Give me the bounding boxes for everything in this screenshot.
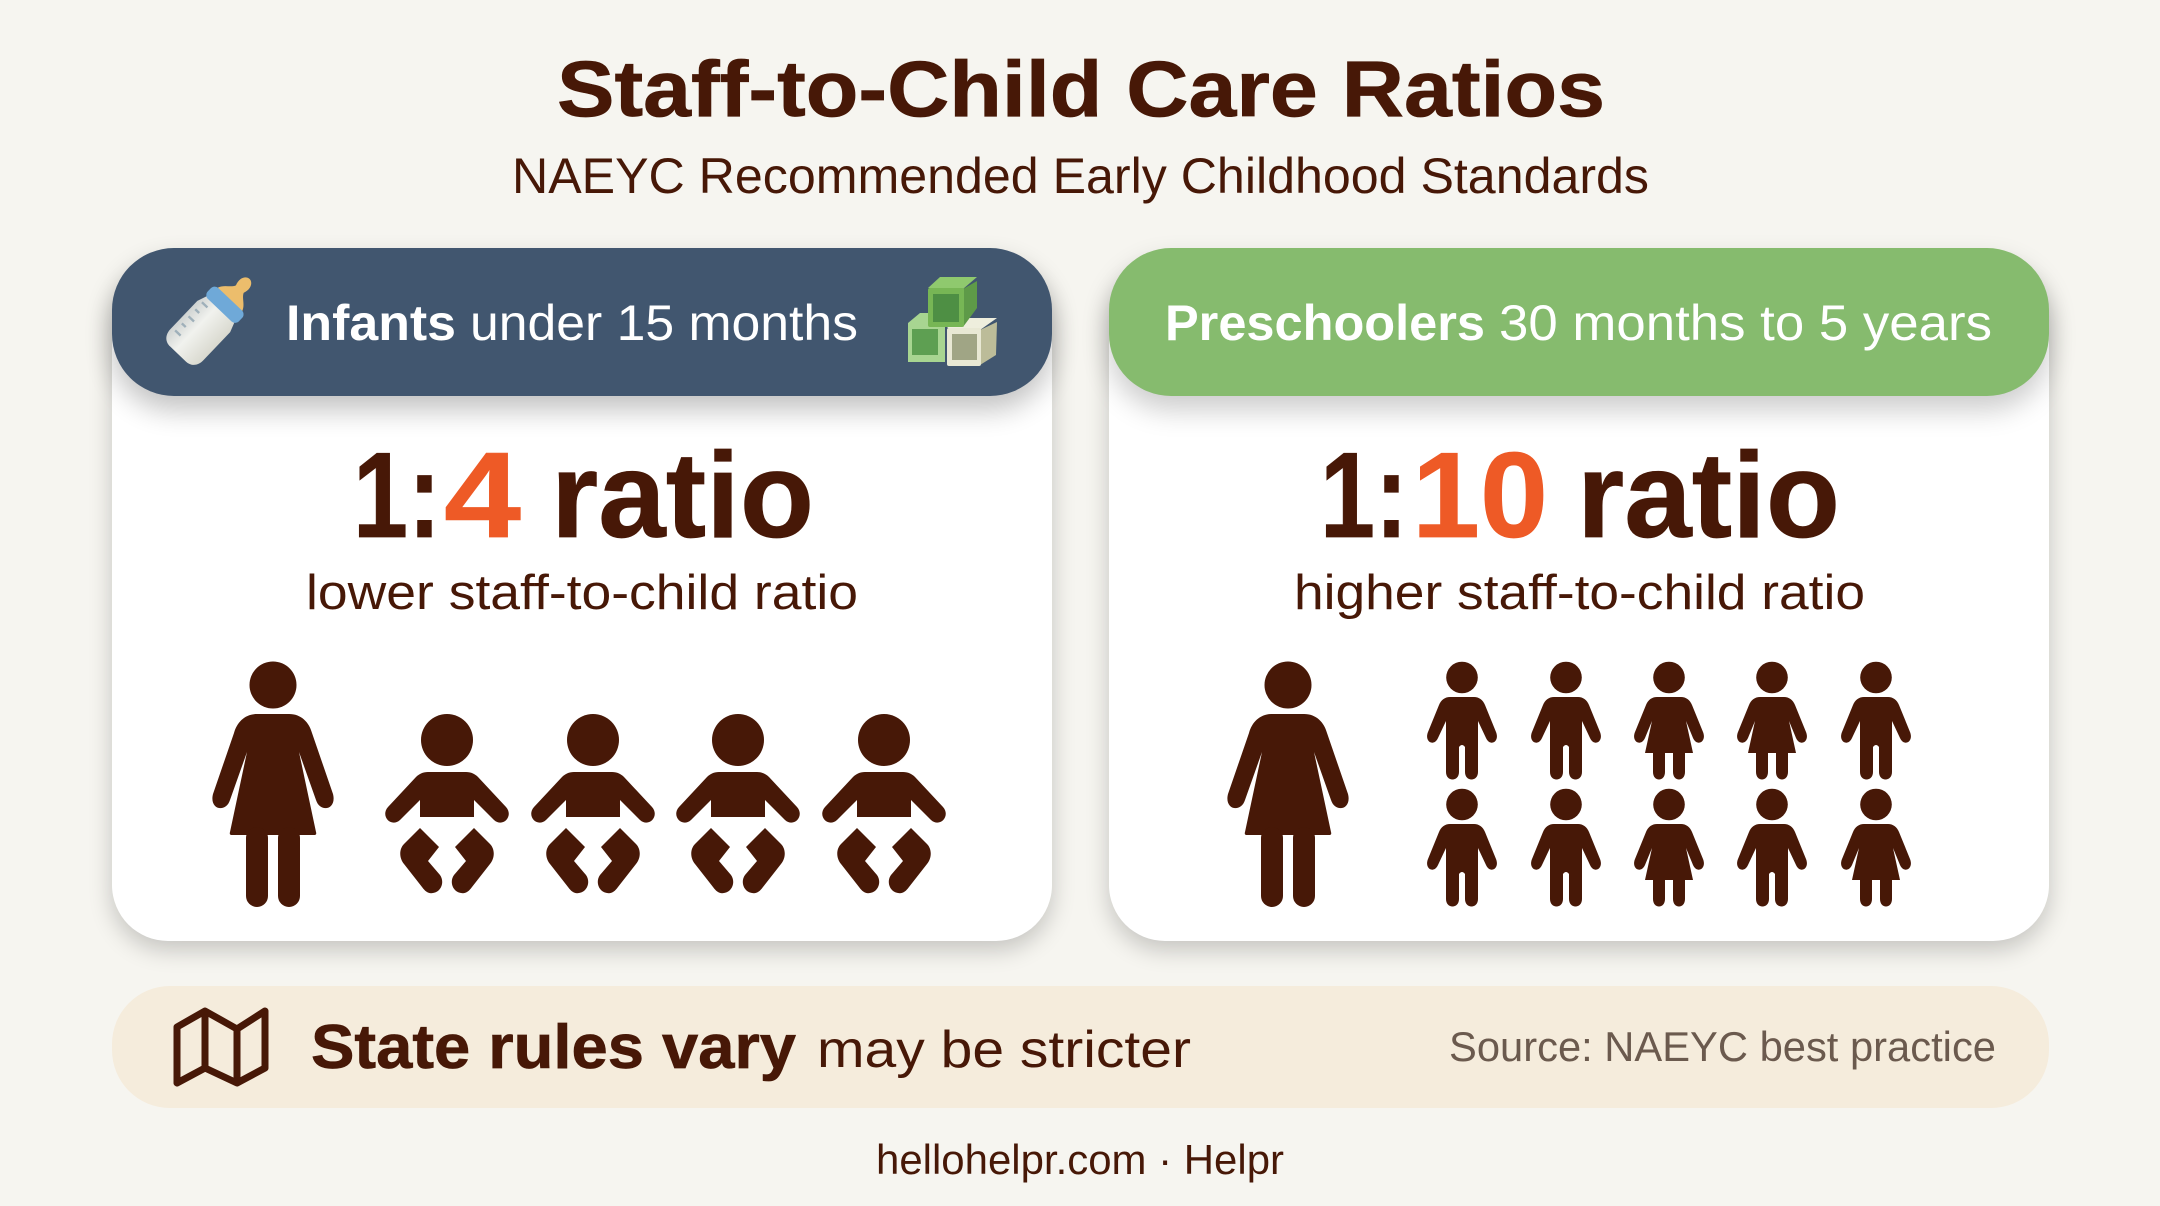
icon: baby bottle <box>162 263 266 370</box>
panel: state rules note <box>112 986 2049 1108</box>
note detail: may be stricter <box>817 1021 1191 1079</box>
icon: toy blocks <box>908 277 997 366</box>
ratio: 1:4: 4 <box>444 427 521 563</box>
card: infants body <box>112 262 1052 950</box>
header text: under 15 months: under 15 months <box>470 295 858 351</box>
caption: lower ratio: lower staff-to-child ratio <box>306 566 858 620</box>
ratio: 1:10: 10 <box>1412 427 1548 563</box>
panel: infants <box>112 248 1052 950</box>
icon: caregiver and ten children <box>1227 662 1911 907</box>
title: Staff-to-Child Care Ratios <box>557 44 1605 133</box>
panel: preschoolers <box>1109 248 2049 950</box>
ratio: 1:4 <box>353 427 814 563</box>
source: Source: NAEYC best practice <box>1449 1023 1996 1070</box>
header band: infants <box>112 248 1052 410</box>
ratio: 1:10 <box>1320 427 1840 563</box>
header text: infants: Infants <box>286 295 456 351</box>
ratio: 1:4: ratio <box>551 427 814 563</box>
ratio: 1:10: ratio <box>1577 427 1840 563</box>
subtitle: NAEYC Recommended Early Childhood Standards <box>512 148 1649 204</box>
icon: folded map <box>177 1011 265 1083</box>
header band: preschoolers <box>1109 248 2049 410</box>
card: preschoolers body <box>1109 262 2049 950</box>
header text: age range: 30 months to 5 years <box>1499 295 1992 351</box>
caption: higher ratio: higher staff-to-child ratio <box>1294 566 1865 620</box>
ratio: 1:10: 1: <box>1320 427 1408 563</box>
icon: caregiver and four infants <box>212 662 946 907</box>
footer credit: hellohelpr.com · Helpr <box>876 1136 1284 1183</box>
header text: preschoolers: Preschoolers <box>1165 295 1485 351</box>
note heading: State rules vary <box>311 1013 797 1082</box>
ratio: 1:4: 1: <box>353 427 441 563</box>
